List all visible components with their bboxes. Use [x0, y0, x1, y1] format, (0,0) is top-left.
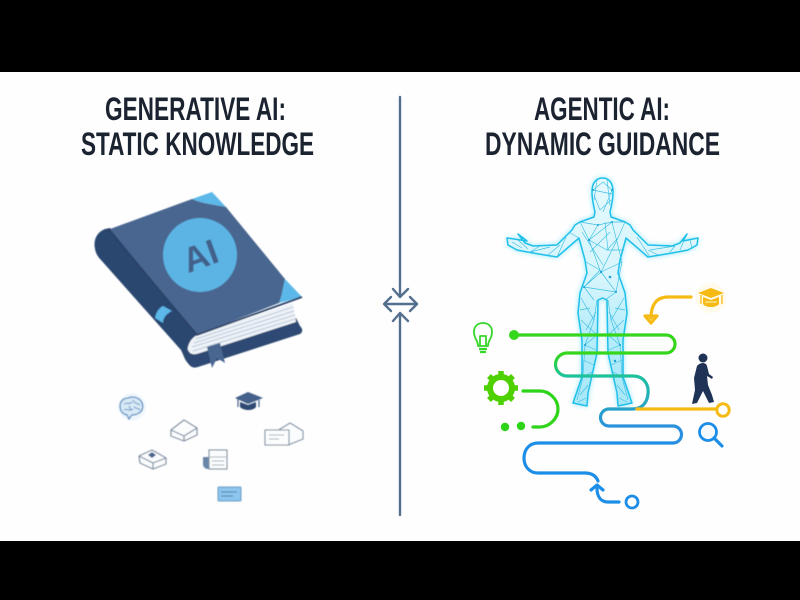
gold path: [637, 407, 716, 411]
icon: AI book: [94, 192, 302, 368]
icon: gear: [484, 371, 518, 405]
book pages: [188, 303, 296, 354]
icon: gold graduation cap: [696, 283, 726, 313]
blue cover corners: [192, 192, 226, 207]
bookmark: [207, 343, 225, 368]
gold arrow: [645, 297, 691, 323]
icon: magnifier: [700, 424, 722, 446]
book back cover: [185, 318, 302, 368]
icon: graduation cap: [235, 392, 263, 410]
book cover: [110, 199, 285, 335]
winding path: [501, 297, 729, 508]
start dot of green path: [509, 330, 519, 340]
bottom node: [626, 496, 638, 508]
green dots: [501, 422, 525, 431]
title: agentic AI: AGENTIC AI:: [534, 91, 670, 127]
title: generative AI: STATIC KNOWLEDGE: [81, 126, 314, 162]
icon: brain: [118, 393, 146, 421]
book spine: [94, 228, 197, 364]
icon: light bulb: [474, 323, 492, 352]
spine blue band: [155, 306, 172, 323]
figure mesh: [512, 180, 692, 402]
icon: cards: [265, 423, 303, 445]
mesh nodes: [583, 189, 621, 362]
AI badge: AI: [177, 232, 224, 281]
title: generative AI: GENERATIVE AI:: [105, 91, 286, 127]
icon: blue note card: [218, 487, 241, 501]
icon: open box: [171, 420, 197, 441]
icon: box with diamond: [139, 450, 166, 469]
title: agentic AI: [485, 91, 720, 162]
gold node: [717, 404, 729, 416]
gear tail path: [523, 391, 558, 427]
green-to-blue path: [513, 335, 682, 443]
knowledge icons scattered: [118, 392, 303, 501]
icon: document: [203, 450, 227, 469]
figure body: [507, 178, 698, 406]
icon: walking person: [692, 354, 714, 404]
figure glow: [507, 178, 698, 406]
title: generative AI: [81, 91, 314, 162]
center divider with arrows: [384, 97, 417, 515]
human mesh figure: [507, 178, 698, 406]
blue path lower: [524, 443, 673, 481]
AI badge: [163, 218, 237, 292]
bottom arrow: [591, 485, 619, 502]
